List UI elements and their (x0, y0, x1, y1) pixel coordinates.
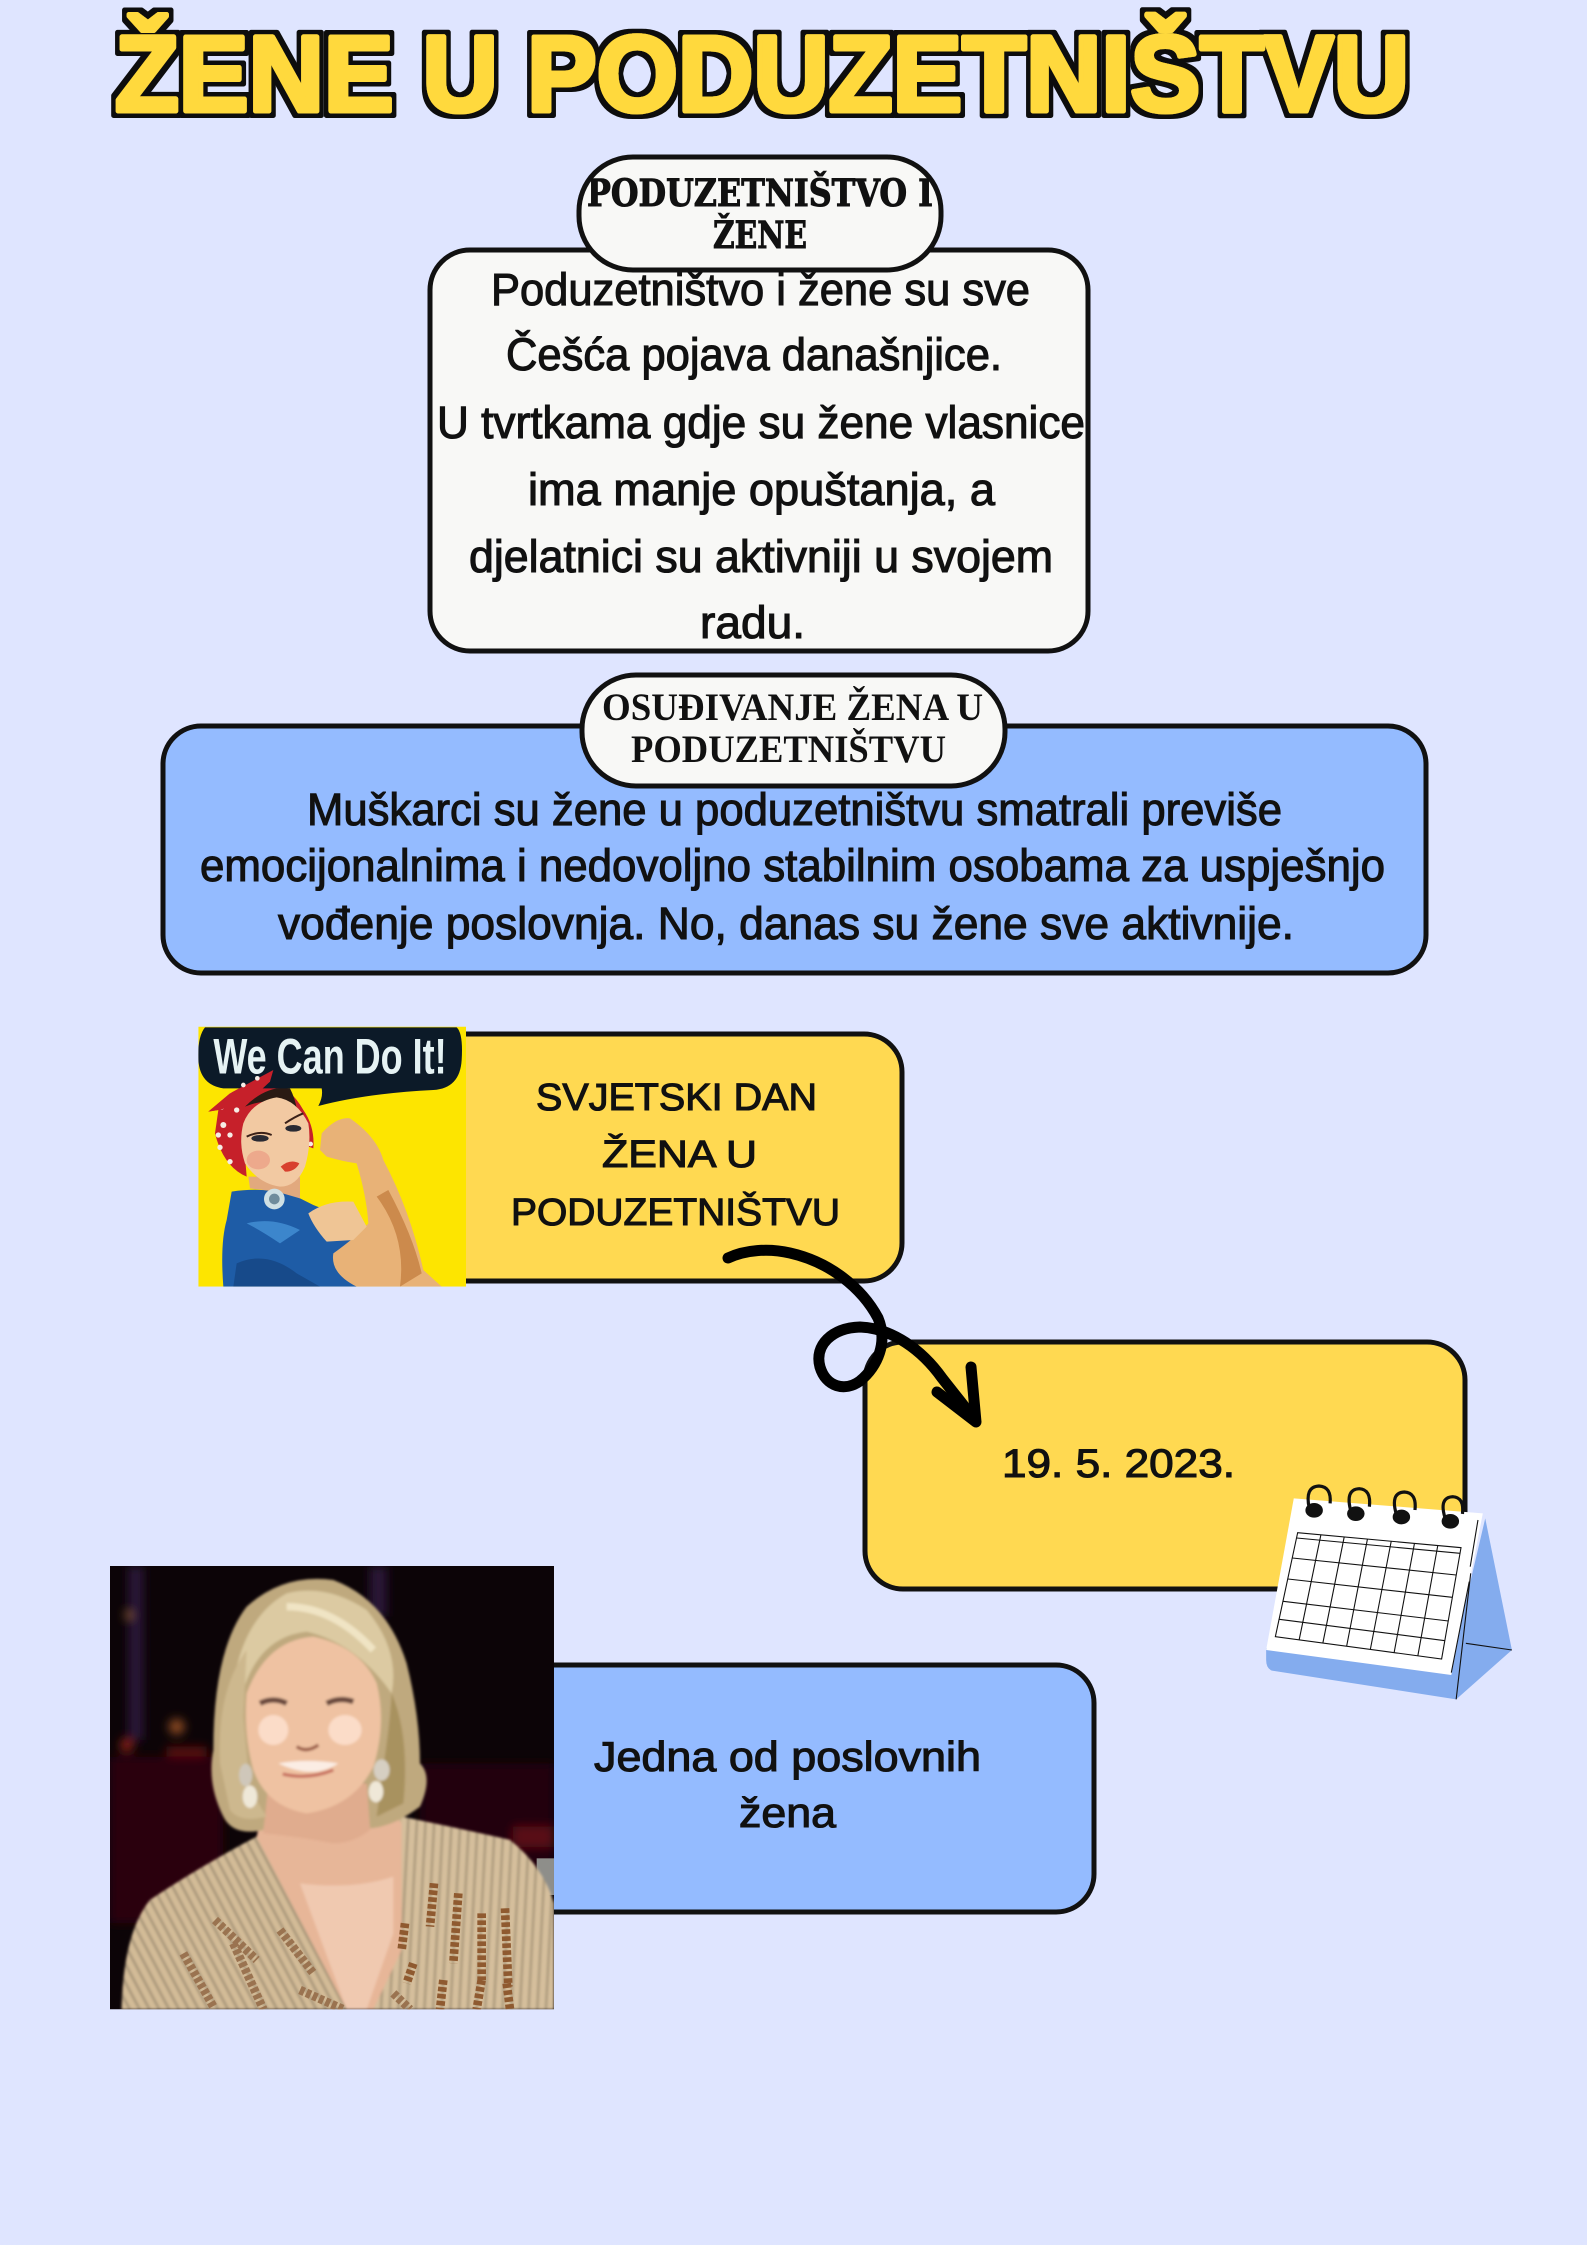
box text: ŽENA U (602, 1133, 757, 1176)
heading pill: ŽENE (713, 213, 807, 257)
yellow date box (865, 1342, 1465, 1589)
caption text (594, 1733, 981, 1836)
body text: Muškarci su žene u poduzetništvu smatrali previše (307, 784, 1282, 835)
body text (200, 784, 1385, 949)
heading pill: PODUZETNIŠTVU (631, 726, 946, 771)
body text: ima manje opuštanja, a (528, 464, 996, 515)
body text: U tvrtkama gdje su žene vlasnice (437, 397, 1085, 448)
box text: PODUZETNIŠTVU (511, 1190, 840, 1234)
title: ŽENE U PODUZETNIŠTVU (115, 13, 1409, 134)
heading pill (582, 675, 1005, 786)
blue caption box (500, 1665, 1094, 1912)
panel: datum (865, 1342, 1465, 1589)
panel: svjetski dan žena (198, 1027, 902, 1287)
body text: radu. (700, 597, 805, 648)
poster: we can do it (198, 1027, 466, 1287)
poster slogan: We Can Do It! (213, 1028, 447, 1084)
body text: Poduzetništvo i žene su sve (491, 264, 1030, 315)
blue text box (163, 726, 1426, 973)
body text: djelatnici su aktivniji u svojem (469, 531, 1053, 582)
body text (437, 264, 1085, 648)
body text: emocijonalnima i nedovoljno stabilnim osobama za uspješnjo (200, 840, 1385, 891)
heading pill (579, 157, 941, 270)
caption text: žena (739, 1789, 837, 1836)
caption text: Jedna od poslovnih (594, 1733, 981, 1780)
curly arrow (728, 1250, 976, 1422)
icon: desk calendar (1266, 1486, 1512, 1699)
box text (511, 1077, 840, 1234)
photo: businesswoman portrait (110, 1566, 554, 2009)
white text box (430, 250, 1088, 651)
panel: osuđivanje žena (163, 675, 1426, 973)
panel: poduzetništvo i žene (430, 157, 1088, 651)
yellow box (380, 1034, 902, 1281)
box text: SVJETSKI DAN (536, 1077, 817, 1119)
heading pill: OSUĐIVANJE ŽENA U (602, 685, 983, 729)
infographic canvas (110, 7, 1512, 2010)
panel: poslovna žena (110, 1566, 1094, 2009)
date text: 19. 5. 2023. (1002, 1442, 1235, 1486)
body text: Češća pojava današnjice. (506, 329, 1002, 380)
body text: vođenje poslovnja. No, danas su žene sve aktivnije. (278, 898, 1294, 949)
heading pill: PODUZETNIŠTVO I (587, 171, 933, 215)
